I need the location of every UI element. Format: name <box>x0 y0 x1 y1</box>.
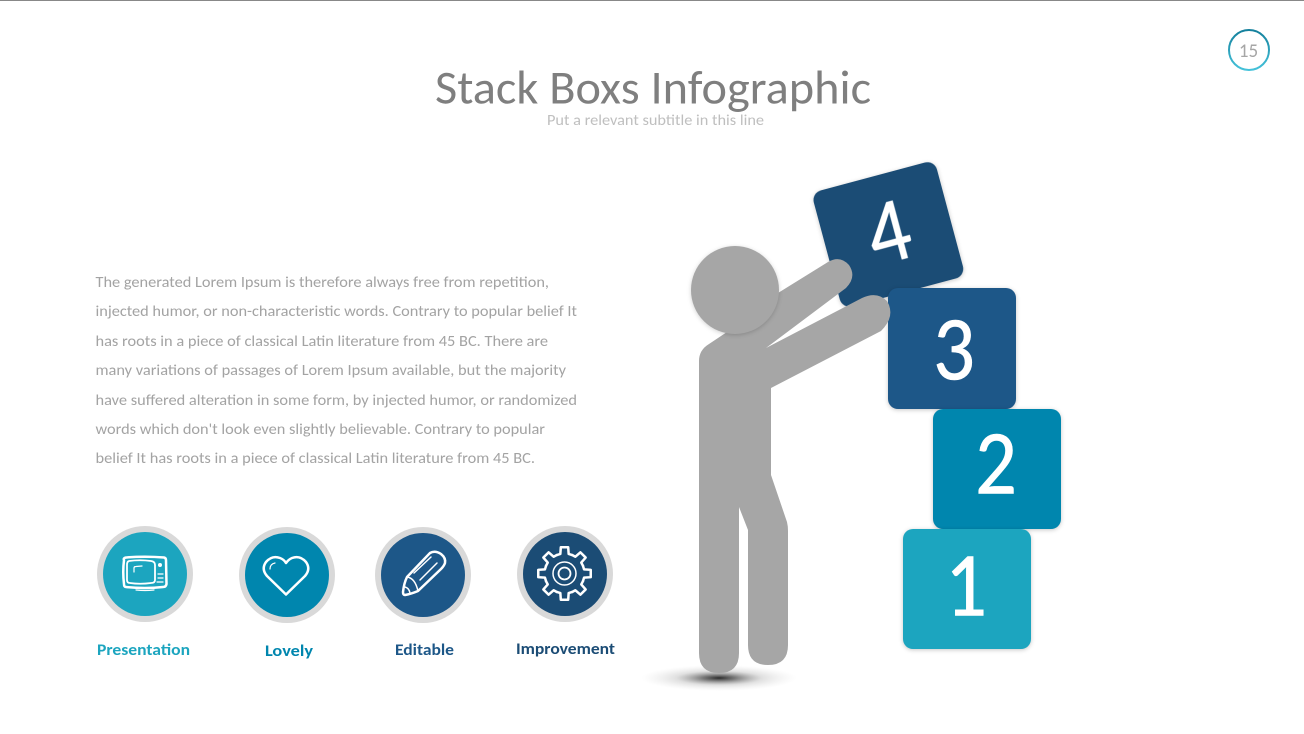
body paragraph: many variations of passages of Lorem Ipsum available, but the majority <box>96 362 566 380</box>
stick figure <box>691 246 890 673</box>
box 2 <box>933 406 1061 529</box>
box 3 <box>888 288 1016 409</box>
icon: pencil <box>375 527 471 623</box>
icon: presentation screen <box>97 526 193 622</box>
label: Editable: Editable <box>395 640 454 660</box>
body paragraph: has roots in a piece of classical Latin literature from 45 BC. There are <box>96 333 548 351</box>
box 4 (tilted) <box>811 160 965 309</box>
page number badge <box>1229 30 1269 70</box>
body paragraph <box>96 274 577 468</box>
figure body and legs <box>699 259 890 673</box>
icon: heart <box>239 527 335 623</box>
figure head <box>691 246 779 334</box>
title: Stack Boxs Infographic <box>435 58 871 116</box>
label: Lovely: Lovely <box>265 641 313 661</box>
box 1: 1 <box>945 528 987 641</box>
label: Improvement: Improvement <box>516 639 615 659</box>
box 4 (tilted): 4 <box>853 171 923 291</box>
ground shadow <box>641 665 797 691</box>
body paragraph: The generated Lorem Ipsum is therefore always free from repetition, <box>96 274 549 292</box>
box 2: 2 <box>975 406 1017 519</box>
box 3: 3 <box>933 292 975 405</box>
body paragraph: words which don't look even slightly believable. Contrary to popular <box>96 421 545 439</box>
body paragraph: have suffered alteration in some form, by injected humor, or randomized <box>96 392 577 410</box>
icon: gear <box>517 526 613 622</box>
body paragraph: belief It has roots in a piece of classical Latin literature from 45 BC. <box>96 450 535 468</box>
label: Presentation: Presentation <box>97 640 190 660</box>
box 1 <box>903 528 1031 649</box>
page number badge: 15 <box>1239 40 1258 63</box>
subtitle: Put a relevant subtitle in this line <box>547 111 764 130</box>
body paragraph: injected humor, or non-characteristic words. Contrary to popular belief It <box>96 303 577 321</box>
